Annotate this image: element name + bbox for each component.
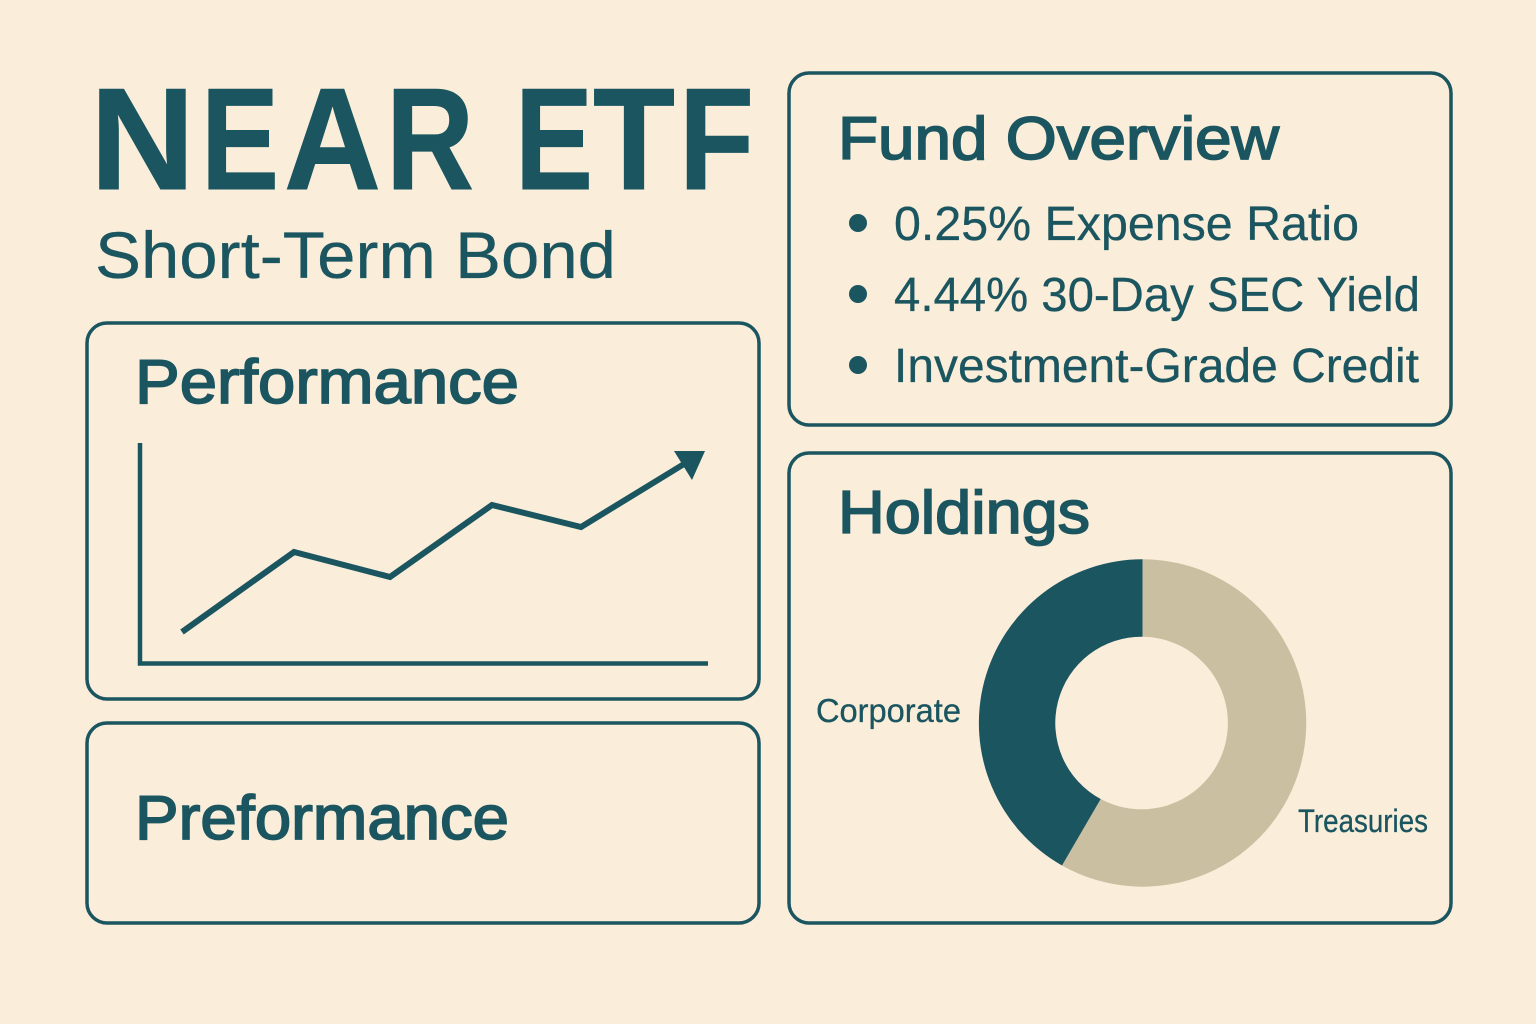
bullet: credit quality: Investment-Grade Credit	[894, 340, 1419, 393]
heading: preformance: Preformance	[135, 784, 509, 853]
bullet: SEC yield: 4.44% 30-Day SEC Yield	[894, 269, 1420, 322]
label: corporate: Corporate	[816, 692, 961, 729]
title: R	[386, 58, 474, 220]
panel: holdings	[789, 453, 1451, 923]
subtitle: Short-Term Bond	[95, 218, 616, 292]
line chart trend	[182, 464, 684, 632]
title: F	[679, 58, 754, 220]
label: treasuries: Treasuries	[1298, 803, 1428, 839]
donut segment: corporate	[979, 559, 1142, 866]
donut chart	[979, 559, 1306, 887]
heading: fund overview: Fund Overview	[838, 105, 1280, 172]
bullet: expense ratio: 0.25% Expense Ratio	[894, 198, 1359, 251]
heading: performance: Performance	[135, 348, 519, 417]
title: T	[593, 58, 675, 220]
title: E	[201, 58, 279, 220]
panel: preformance	[87, 723, 759, 923]
panel: performance chart	[87, 323, 759, 699]
title: N	[90, 58, 195, 220]
heading: holdings: Holdings	[838, 479, 1090, 546]
donut segment: treasuries	[1062, 559, 1306, 887]
panel: fund overview	[789, 73, 1451, 425]
title: E	[515, 58, 593, 220]
icon: arrowhead	[674, 451, 705, 480]
title: A	[284, 58, 381, 220]
chart axes	[140, 443, 708, 664]
